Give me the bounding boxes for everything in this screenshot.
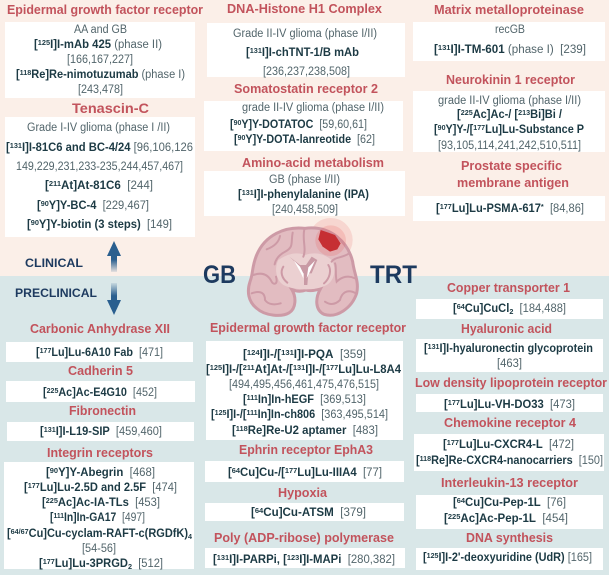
heading: PSMA bbox=[457, 158, 569, 190]
card: Neurokinin agents: 90 bbox=[438, 123, 446, 132]
card: EGFR agents: 125 bbox=[38, 38, 50, 47]
card: Integrin agents: 4 bbox=[188, 532, 193, 541]
card: EGFR preclinical agents: [359] bbox=[340, 349, 365, 361]
card: Somatostatin agents: [59,60,61] bbox=[320, 119, 371, 131]
card: DNA-Histone agents bbox=[207, 23, 405, 78]
card: PSMA agents bbox=[413, 196, 605, 221]
card: Amino-acid agents bbox=[204, 171, 405, 216]
card: PARP agents: I]I-PARPi, [ bbox=[229, 554, 287, 566]
card: Integrin agents: 111 bbox=[53, 511, 64, 520]
card: Chemokine agents bbox=[414, 434, 604, 471]
card: Integrin agents: [497] bbox=[123, 512, 148, 524]
card: EGFR preclinical agents bbox=[206, 341, 403, 440]
card: Tenascin-C agents: [ bbox=[45, 180, 49, 192]
card: DNA synthesis agents: 125 bbox=[427, 551, 439, 560]
card: Tenascin-C agents: 149,229,231,233-235,244,457,467] bbox=[16, 161, 183, 173]
heading: EGFR preclinical: Epidermal growth factor receptor bbox=[210, 320, 406, 335]
heading: DNA-Histone: DNA-Histone H1 Complex bbox=[227, 1, 383, 16]
card: Integrin agents: [ bbox=[46, 467, 50, 479]
card: EGFR preclinical agents: 125 bbox=[210, 363, 222, 372]
card: DNA-Histone agents: [ bbox=[246, 47, 250, 59]
arrow: up to clinical bbox=[107, 241, 121, 272]
card: Tenascin-C agents: [ bbox=[6, 142, 10, 154]
card: Integrin agents: [474] bbox=[152, 482, 178, 494]
card: Integrin agents: Lu]Lu-2.5D and 2.5F bbox=[40, 482, 146, 494]
card: MMP agents bbox=[413, 22, 605, 61]
card: Interleukin agents: Ac]Ac-Pep-1L bbox=[460, 513, 536, 525]
card: Hyaluronic agents: [463] bbox=[497, 358, 522, 370]
card: MMP agents: 131 bbox=[438, 43, 451, 52]
card: Ephrin agents: [ bbox=[228, 467, 232, 479]
panel: Hypoxia bbox=[205, 485, 404, 521]
card: Integrin agents: 2 bbox=[128, 562, 132, 571]
card: PSMA agents: 177 bbox=[440, 202, 452, 211]
panel: Neurokinin 1 receptor bbox=[413, 72, 605, 152]
heading: Copper transporter: Copper transporter 1 bbox=[447, 280, 570, 295]
label: TRT: TRT bbox=[370, 261, 417, 289]
card: DNA synthesis agents: I]I-2'-deoxyuridine (UdR) bbox=[439, 552, 565, 564]
heading: Matrix metalloproteinase: Matrix metalloproteinase bbox=[434, 2, 584, 17]
card: Neurokinin agents: Ac]Ac-/ [ bbox=[473, 109, 518, 121]
card: Chemokine agents: Lu]Lu-CXCR4-L bbox=[459, 439, 543, 451]
card: Fibronectin agents: 131 bbox=[44, 425, 56, 434]
card: Tenascin-C agents: I]I-81C6 and BC-4/24 bbox=[22, 142, 131, 154]
card: Integrin agents: Cu]Cu-cyclam-RAFT-c(RGDfK) bbox=[29, 528, 188, 540]
card: Interleukin agents: [454] bbox=[542, 513, 568, 525]
panel: Interleukin-13 receptor bbox=[416, 475, 603, 529]
card: Tenascin-C agents: [ bbox=[37, 200, 41, 212]
panel: DNA synthesis bbox=[416, 530, 603, 570]
card: CA XII agents: Lu]Lu-6A10 Fab bbox=[51, 347, 133, 359]
heading: Hyaluronic acid: Hyaluronic acid bbox=[461, 321, 552, 336]
card: Amino-acid agents: I]I-phenylalanine (IPA) bbox=[254, 189, 369, 201]
card: Somatostatin agents: [62] bbox=[357, 134, 377, 146]
card: LDL agents bbox=[416, 394, 603, 412]
label: PRECLINICAL: PRECLINICAL bbox=[15, 286, 97, 300]
preclinical background bbox=[0, 276, 609, 575]
card: Neurokinin agents: [ bbox=[434, 124, 438, 136]
card: Tenascin-C agents: Grade I-IV glioma (phase I /II) bbox=[27, 122, 170, 134]
card: Integrin agents: [468] bbox=[130, 467, 155, 479]
card: Cadherin agents: Ac]Ac-E4G10 bbox=[58, 387, 127, 399]
card: Hypoxia agents: [ bbox=[251, 507, 255, 519]
card: MMP agents: recGB bbox=[495, 24, 525, 36]
icon: brain with tumor bbox=[248, 218, 357, 315]
card: Integrin agents: [453] bbox=[135, 497, 161, 509]
heading: PARP: Poly (ADP-ribose) polymerase bbox=[214, 530, 394, 545]
card: DNA synthesis agents: [165] bbox=[568, 552, 593, 564]
card: Ephrin agents: Cu]Cu-/[ bbox=[240, 467, 285, 479]
card: CA XII agents: [471] bbox=[139, 347, 165, 359]
card: EGFR preclinical agents: Re]Re-U2 aptamer bbox=[248, 425, 347, 437]
heading: Tenascin-C: Tenascin-C bbox=[72, 100, 149, 116]
card: Neurokinin agents: [ bbox=[457, 109, 461, 121]
card: PSMA agents: * bbox=[541, 202, 544, 211]
card: PARP agents bbox=[205, 548, 405, 568]
card: Hypoxia agents: [379] bbox=[340, 507, 366, 519]
card: EGFR preclinical agents: [363,495,514] bbox=[322, 409, 392, 421]
card: EGFR preclinical agents: 111 bbox=[247, 408, 258, 417]
card: PSMA agents: Lu]Lu-PSMA-617 bbox=[452, 203, 541, 215]
card: Somatostatin agents: [ bbox=[234, 134, 238, 146]
clinical background bbox=[0, 0, 609, 276]
card: Neurokinin agents: 225 bbox=[461, 108, 473, 117]
card: EGFR preclinical agents: [483] bbox=[353, 425, 378, 437]
card: PARP agents: I]I-MAPi bbox=[299, 554, 341, 566]
panel: Chemokine receptor 4 bbox=[414, 415, 604, 471]
card: Integrin agents: [54-56] bbox=[82, 543, 116, 555]
card: Integrin agents: 177 bbox=[28, 481, 40, 490]
card: Chemokine agents: [ bbox=[416, 455, 420, 467]
card: Integrin agents: 90 bbox=[50, 466, 58, 475]
card: Hyaluronic agents bbox=[416, 339, 603, 372]
card: Amino-acid agents: GB (phase I/II) bbox=[269, 174, 340, 186]
heading: Neurokinin: Neurokinin 1 receptor bbox=[446, 72, 575, 87]
heading: EGFR: Epidermal growth factor receptor bbox=[7, 2, 203, 17]
card: LDL agents: [ bbox=[444, 399, 448, 411]
card: Integrin agents: [ bbox=[24, 482, 28, 494]
card: Somatostatin agents: grade II-IV glioma (phase I/II) bbox=[242, 102, 384, 114]
card: Interleukin agents: [ bbox=[453, 497, 457, 509]
card: EGFR preclinical agents: In]In-ch806 bbox=[258, 409, 315, 421]
card: Integrin agents: In]In-GA17 bbox=[64, 512, 116, 524]
heading: Interleukin-13: Interleukin-13 receptor bbox=[441, 475, 578, 490]
card: Chemokine agents: [472] bbox=[549, 439, 575, 451]
card: Tenascin-C agents: [96,106,126 bbox=[134, 142, 195, 154]
card: Integrin agents: [ bbox=[39, 558, 43, 570]
card: Tenascin-C agents: Y]Y-BC-4 bbox=[49, 200, 97, 212]
card: PARP agents: [280,382] bbox=[348, 554, 396, 566]
card: Tenascin-C agents: 90 bbox=[41, 199, 49, 208]
heading: Hypoxia: Hypoxia bbox=[278, 485, 328, 500]
card: EGFR preclinical agents: 211 bbox=[243, 363, 255, 372]
card: Copper agents: [ bbox=[453, 303, 457, 315]
panel: EGFR clinical bbox=[5, 2, 203, 98]
card: Hyaluronic agents: I]I-hyaluronectin glycoprotein bbox=[440, 343, 593, 355]
card: EGFR preclinical agents: [ bbox=[211, 409, 215, 421]
card: Tenascin-C agents: [229,467] bbox=[103, 200, 151, 212]
card: Amino-acid agents: 131 bbox=[242, 188, 254, 197]
panel: DNA-Histone H1 Complex bbox=[207, 1, 405, 78]
card: Ephrin agents bbox=[205, 461, 404, 482]
card: EGFR preclinical agents: [494,495,456,461,475,476,515] bbox=[229, 379, 379, 391]
card: DNA-Histone agents: I]I-chTNT-1/B mAb bbox=[262, 47, 359, 59]
heading: Amino-acid: Amino-acid metabolism bbox=[242, 155, 384, 170]
arrow: down to preclinical bbox=[107, 283, 121, 315]
card: Somatostatin agents: [ bbox=[230, 119, 234, 131]
card: Neurokinin agents: 177 bbox=[473, 123, 485, 132]
card: CA XII agents: [ bbox=[36, 347, 40, 359]
card: Integrin agents: [ bbox=[7, 528, 11, 540]
card: MMP agents: I]I-TM-601 bbox=[451, 44, 505, 56]
card: DNA synthesis agents bbox=[416, 548, 603, 570]
card: EGFR agents: AA and GB bbox=[74, 24, 127, 36]
card: PARP agents: 123 bbox=[287, 553, 299, 562]
card: LDL agents: Lu]Lu-VH-DO33 bbox=[460, 399, 544, 411]
card: Fibronectin agents: [ bbox=[40, 426, 44, 438]
heading: PSMA: Prostate specific bbox=[461, 158, 562, 173]
card: Neurokinin agents: [93,105,114,241,242,510,511] bbox=[438, 140, 581, 152]
card: Hyaluronic agents: [ bbox=[424, 343, 428, 355]
card: Chemokine agents: [150] bbox=[579, 455, 605, 467]
card: Tenascin-C agents: 211 bbox=[49, 179, 61, 188]
heading: Somatostatin: Somatostatin receptor 2 bbox=[234, 81, 378, 96]
heading: Integrin: Integrin receptors bbox=[47, 445, 153, 460]
card: Neurokinin agents: grade II-IV glioma (phase I/II) bbox=[438, 95, 581, 107]
card: Hypoxia agents bbox=[205, 503, 404, 521]
card: EGFR preclinical agents: [369,513] bbox=[320, 394, 368, 406]
card: Integrin agents: 64/67 bbox=[11, 527, 29, 536]
card: Ephrin agents: Lu]Lu-IIIA4 bbox=[297, 467, 357, 479]
panel: Amino-acid metabolism bbox=[204, 155, 405, 216]
card: EGFR agents: [ bbox=[34, 39, 38, 51]
card: Amino-acid agents: [240,458,509] bbox=[272, 204, 338, 216]
card: Chemokine agents: 177 bbox=[447, 438, 459, 447]
card: MMP agents: [ bbox=[434, 44, 438, 56]
card: Chemokine agents: 118 bbox=[420, 454, 431, 463]
card: Somatostatin agents: 90 bbox=[238, 133, 245, 142]
card: EGFR preclinical agents: 111 bbox=[247, 393, 258, 402]
heading: CA XII: Carbonic Anhydrase XII bbox=[30, 321, 170, 336]
card: LDL agents: [473] bbox=[550, 399, 576, 411]
panel: Low density lipoprotein receptor bbox=[415, 375, 607, 412]
card: Interleukin agents: [76] bbox=[547, 497, 566, 509]
card: EGFR preclinical agents: 118 bbox=[236, 424, 248, 433]
card: Integrin agents: Ac]Ac-IA-TLs bbox=[58, 497, 129, 509]
card: CA XII agents: 177 bbox=[40, 346, 51, 355]
label: CLINICAL: CLINICAL bbox=[25, 256, 83, 270]
heading: Fibronectin: Fibronectin bbox=[69, 403, 136, 418]
card: Tenascin-C agents: 131 bbox=[10, 141, 22, 150]
card: Cadherin agents: 225 bbox=[47, 386, 58, 395]
card: EGFR preclinical agents: [ bbox=[243, 349, 247, 361]
card: PARP agents: [ bbox=[213, 554, 217, 566]
card: Copper agents: [184,488] bbox=[513, 303, 566, 315]
card: Integrin agents: 225 bbox=[46, 496, 58, 505]
card: EGFR agents: [243,478] bbox=[78, 84, 123, 96]
panel: Carbonic Anhydrase XII bbox=[6, 321, 193, 362]
card: Hypoxia agents: Cu]Cu-ATSM bbox=[263, 507, 334, 519]
heading: Chemokine receptor: Chemokine receptor 4 bbox=[444, 415, 577, 430]
card: Fibronectin agents: [459,460] bbox=[116, 426, 164, 438]
card: Integrin agents: [ bbox=[42, 497, 46, 509]
card: Neurokinin agents: Y]Y-/[ bbox=[446, 124, 473, 136]
card: EGFR preclinical agents: 177 bbox=[326, 363, 338, 372]
card: Copper agents bbox=[416, 299, 603, 319]
card: Tenascin-C agents: At]At-81C6 bbox=[61, 180, 121, 192]
card: EGFR preclinical agents: I]I-/[ bbox=[260, 349, 281, 361]
card: EGFR preclinical agents: [ bbox=[232, 425, 236, 437]
card: Neurokinin agents: 213 bbox=[518, 108, 530, 117]
card: CA XII agents bbox=[6, 342, 193, 362]
card: Integrin agents: Y]Y-Abegrin bbox=[58, 467, 123, 479]
card: EGFR preclinical agents: At]At-/[ bbox=[255, 364, 293, 376]
card: Hyaluronic agents: 131 bbox=[428, 342, 440, 351]
card: EGFR preclinical agents: I]I-PQA bbox=[294, 349, 333, 361]
card: PARP agents: 131 bbox=[217, 553, 229, 562]
panel: Fibronectin bbox=[7, 403, 194, 441]
card: Tenascin-C agents: 90 bbox=[31, 218, 39, 227]
card: Interleukin agents: Cu]Cu-Pep-1L bbox=[465, 497, 541, 509]
card: Chemokine agents: Re]Re-CXCR4-nanocarriers bbox=[431, 455, 573, 467]
card: Tenascin-C agents: [ bbox=[27, 219, 31, 231]
card: Interleukin agents bbox=[416, 495, 603, 529]
card: PSMA agents: [84,86] bbox=[544, 203, 584, 215]
panel: Poly (ADP-ribose) polymerase bbox=[205, 530, 405, 568]
card: EGFR preclinical agents: 125 bbox=[215, 408, 227, 417]
card: Ephrin agents: 64 bbox=[232, 466, 241, 475]
panel: EGFR preclinical bbox=[206, 320, 406, 440]
card: Integrin agents: [512] bbox=[132, 558, 163, 570]
card: Neurokinin agents: Bi]Bi / bbox=[530, 109, 563, 121]
card: EGFR preclinical agents: 131 bbox=[281, 348, 294, 357]
card: Interleukin agents: 225 bbox=[448, 512, 460, 521]
card: EGFR preclinical agents: I]I-/[ bbox=[305, 364, 326, 376]
card: Somatostatin agents: Y]Y-DOTATOC bbox=[241, 119, 313, 131]
card: Neurokinin agents: Lu]Lu-Substance P bbox=[485, 124, 584, 136]
panel: Tenascin-C bbox=[5, 100, 195, 237]
panel: Ephrin receptor EphA3 bbox=[205, 442, 404, 482]
card: Cadherin agents bbox=[6, 381, 195, 402]
card: EGFR agents: (phase II) bbox=[114, 39, 163, 51]
card: EGFR agents: I]I-mAb 425 bbox=[50, 39, 112, 51]
card: Somatostatin agents: Y]Y-DOTA-lanreotide bbox=[245, 134, 351, 146]
card: EGFR preclinical agents: In]In-hEGF bbox=[258, 394, 314, 406]
card: Integrin agents: Lu]Lu-3PRGD bbox=[55, 558, 128, 570]
card: Integrin agents: 177 bbox=[43, 557, 55, 566]
card: DNA synthesis agents: [ bbox=[423, 552, 427, 564]
panel: Integrin receptors bbox=[4, 445, 194, 571]
card: Interleukin agents: [ bbox=[444, 513, 448, 525]
card: EGFR agents: (phase I) bbox=[142, 69, 187, 81]
card: Tenascin-C agents: [244] bbox=[127, 180, 153, 192]
heading: Cadherin 5: Cadherin 5 bbox=[68, 363, 133, 378]
card: EGFR preclinical agents: I]I-/[ bbox=[222, 364, 243, 376]
card: Integrin agents: [ bbox=[50, 512, 54, 524]
card: Copper agents: 64 bbox=[457, 302, 466, 311]
card: Copper agents: 2 bbox=[509, 307, 513, 316]
card: Fibronectin agents: I]I-L19-SIP bbox=[56, 426, 110, 438]
card: Chemokine agents: [ bbox=[443, 439, 447, 451]
card: EGFR preclinical agents: 131 bbox=[293, 363, 305, 372]
card: MMP agents: (phase I) [239] bbox=[508, 44, 585, 56]
card: EGFR agents: [ bbox=[16, 69, 20, 81]
card: Integrin agents bbox=[4, 462, 194, 571]
card: Tenascin-C agents: Y]Y-biotin (3 steps) bbox=[39, 219, 141, 231]
card: Somatostatin agents bbox=[204, 101, 403, 151]
card: Cadherin agents: [ bbox=[43, 387, 47, 399]
card: Ephrin agents: [77] bbox=[363, 467, 382, 479]
card: Cadherin agents: [452] bbox=[133, 387, 159, 399]
card: EGFR agents: Re]Re-nimotuzumab bbox=[31, 69, 138, 81]
card: Tenascin-C agents: [149] bbox=[147, 219, 173, 231]
card: LDL agents: 177 bbox=[448, 398, 460, 407]
panel: Somatostatin receptor 2 bbox=[204, 81, 403, 151]
card: PSMA agents: [ bbox=[436, 203, 440, 215]
panel: Copper transporter 1 bbox=[416, 280, 603, 319]
heading: Ephrin: Ephrin receptor EphA3 bbox=[239, 442, 373, 457]
panel: Cadherin 5 bbox=[6, 363, 195, 402]
heading: PSMA: membrane antigen bbox=[457, 175, 569, 190]
card: DNA-Histone agents: 131 bbox=[250, 46, 262, 55]
card: Neurokinin agents bbox=[413, 91, 605, 152]
card: EGFR preclinical agents: Lu]Lu-L8A4 bbox=[338, 364, 402, 376]
label: GB: GB bbox=[203, 261, 236, 289]
card: Hypoxia agents: 64 bbox=[255, 506, 264, 515]
panel: Prostate specific membrane antigen bbox=[413, 158, 605, 221]
card: EGFR agents: 118 bbox=[20, 68, 31, 77]
card: EGFR preclinical agents: [ bbox=[206, 364, 210, 376]
panel: Matrix metalloproteinase bbox=[413, 2, 605, 61]
card: Ephrin agents: 177 bbox=[285, 466, 297, 475]
card: DNA-Histone agents: Grade II-IV glioma (phase I/II) bbox=[233, 28, 377, 40]
card: Interleukin agents: 64 bbox=[457, 496, 466, 505]
panel: Hyaluronic acid bbox=[416, 321, 603, 372]
card: EGFR agents bbox=[5, 22, 195, 98]
card: Amino-acid agents: [ bbox=[238, 189, 242, 201]
card: Tenascin-C agents bbox=[5, 117, 195, 237]
card: EGFR preclinical agents: [ bbox=[243, 394, 247, 406]
heading: DNA synthesis: DNA synthesis bbox=[466, 530, 553, 545]
card: Somatostatin agents: 90 bbox=[234, 118, 241, 127]
card: EGFR preclinical agents: 124 bbox=[247, 348, 260, 357]
card: EGFR agents: [166,167,227] bbox=[67, 54, 133, 66]
card: EGFR preclinical agents: I]I-/[ bbox=[227, 409, 247, 421]
card: Copper agents: Cu]CuCl bbox=[465, 303, 509, 315]
card: DNA-Histone agents: [236,237,238,508] bbox=[263, 66, 350, 78]
card: Fibronectin agents bbox=[7, 422, 194, 441]
